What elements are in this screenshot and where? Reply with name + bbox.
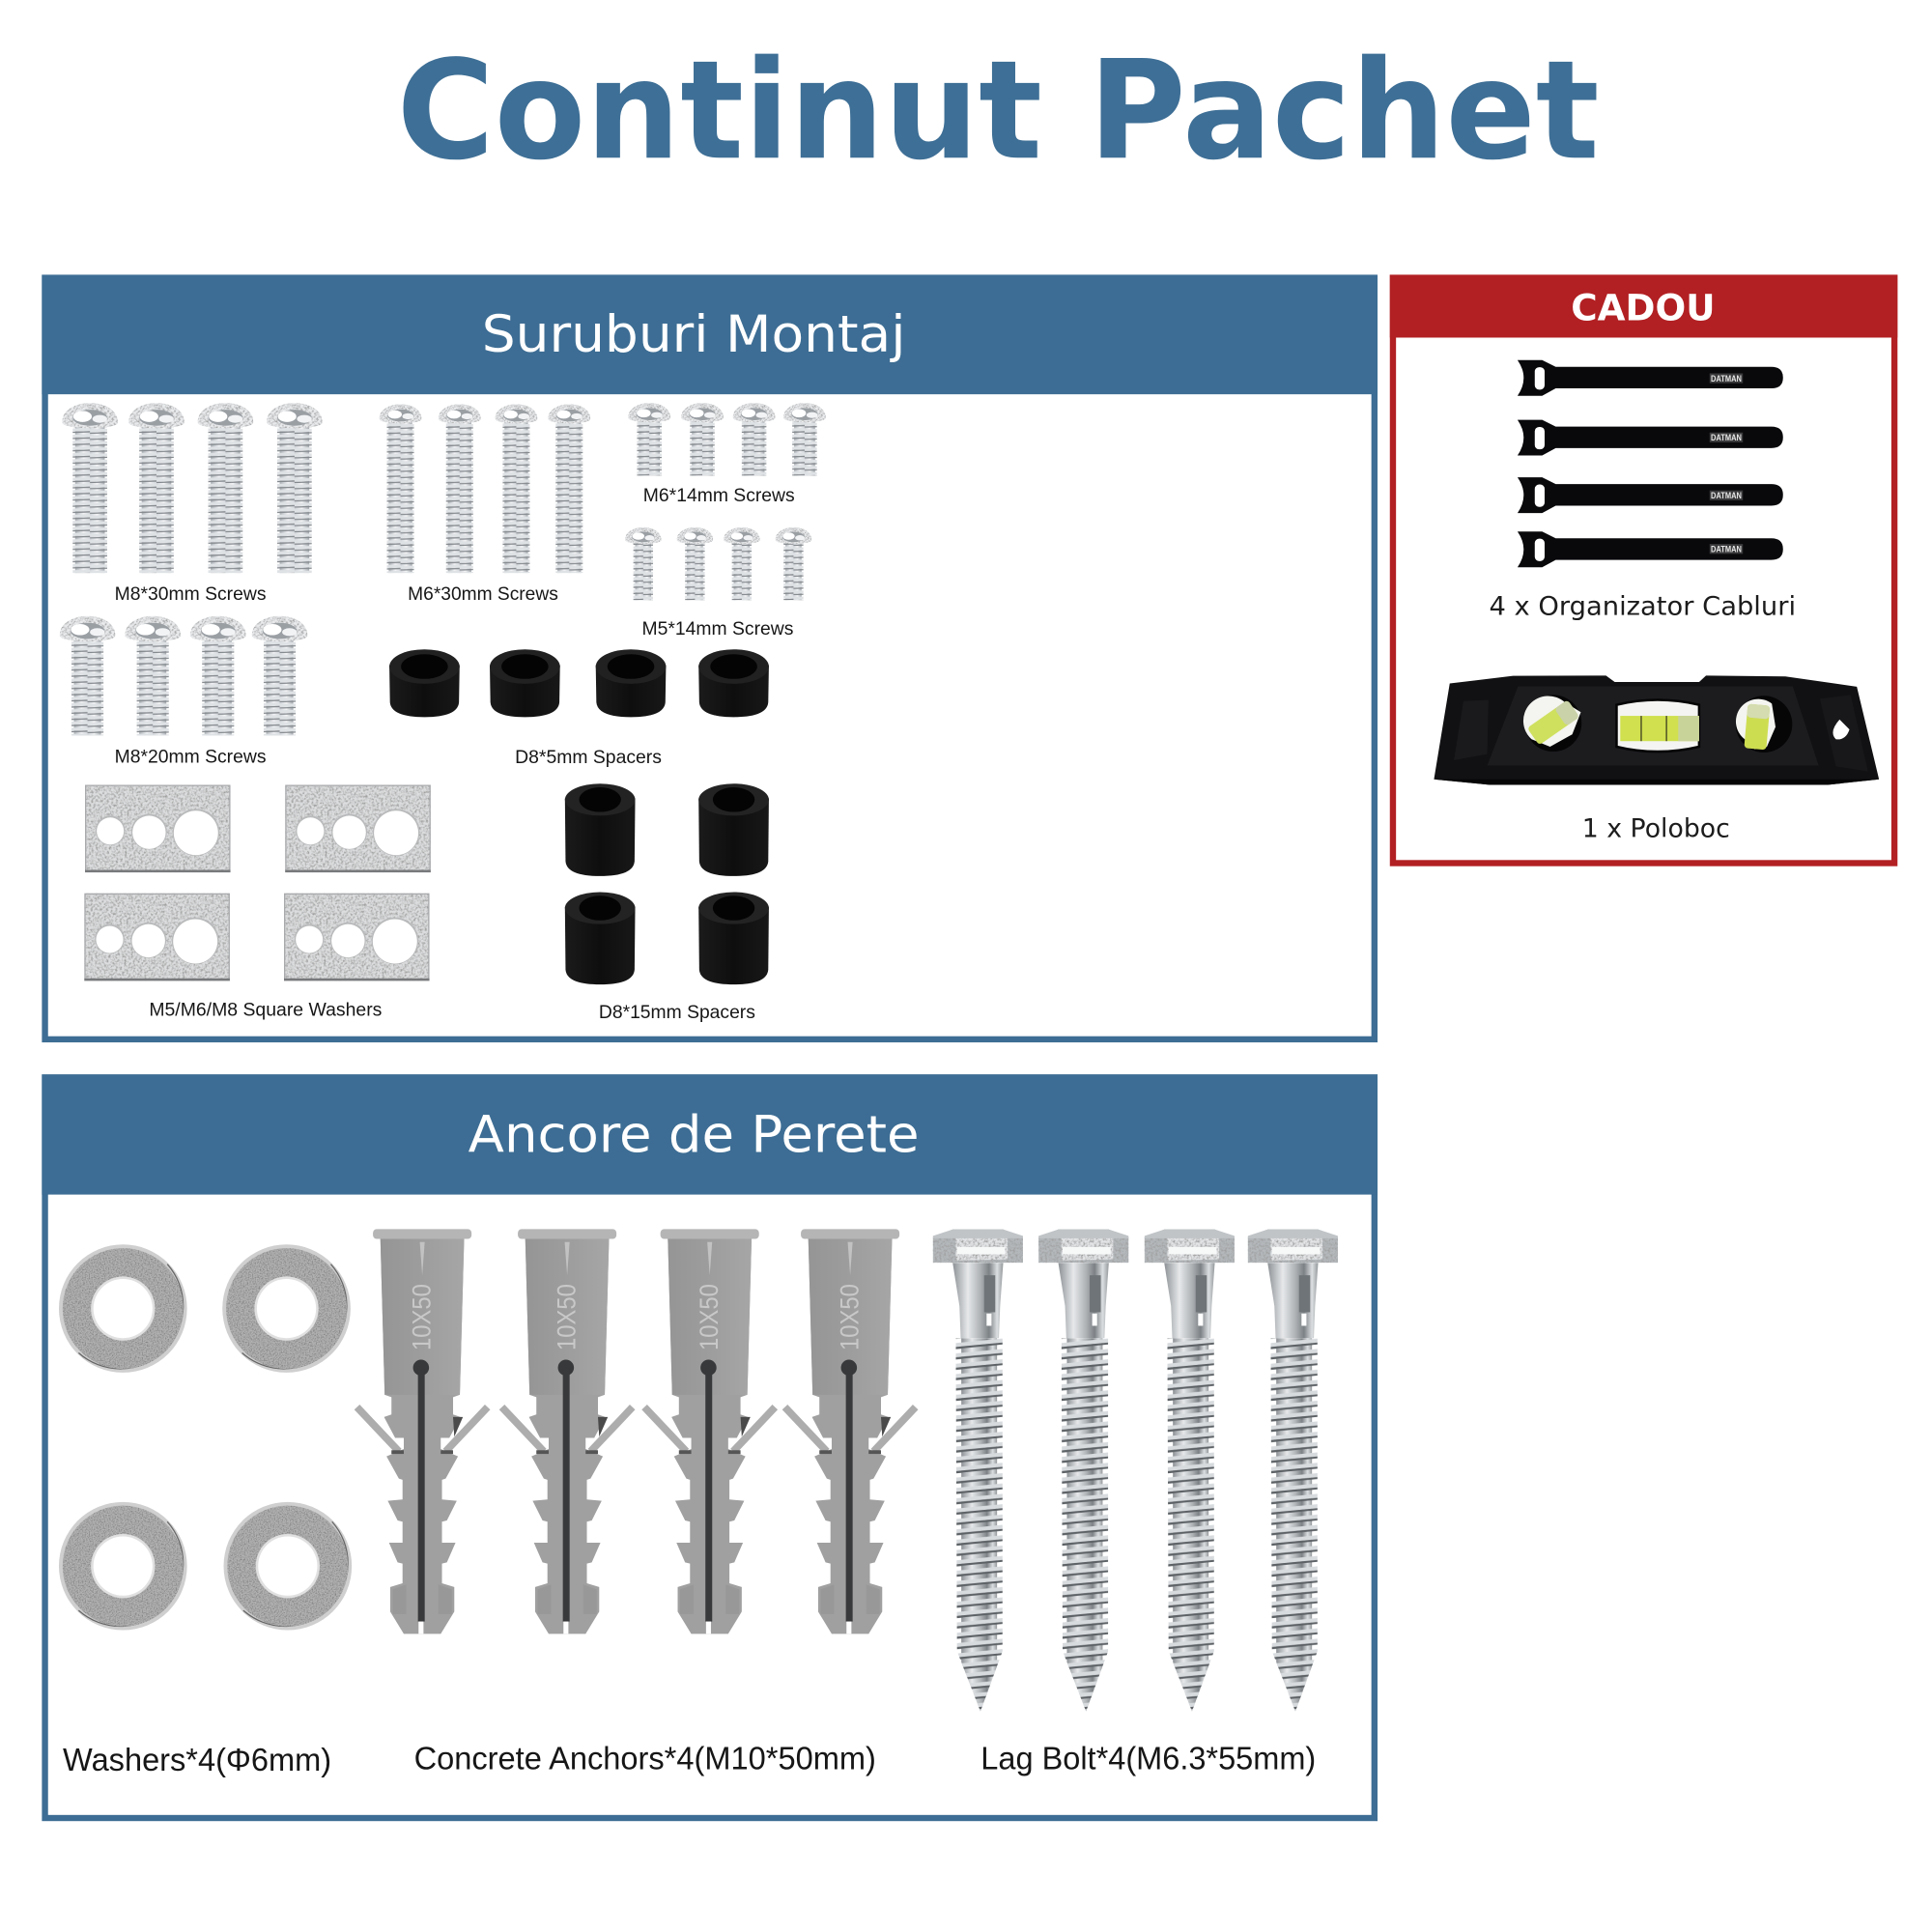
M8*30mm screws — [62, 403, 323, 573]
level label: 1 x Poloboc — [1582, 814, 1730, 844]
concrete anchor 4 — [784, 1229, 916, 1634]
concrete anchor 2 — [502, 1229, 633, 1634]
panel header — [1390, 274, 1897, 337]
heading: Suruburi Montaj — [482, 305, 906, 364]
strap 2 — [1518, 420, 1783, 456]
strap 3 — [1518, 477, 1783, 513]
label: D8*15mm Spacers — [599, 1003, 755, 1023]
title: Continut Pachet — [397, 32, 1600, 190]
M6*30mm screws — [380, 404, 590, 573]
label: Lag Bolt*4(M6.3*55mm) — [980, 1742, 1316, 1777]
label: M6*30mm Screws — [408, 584, 558, 605]
label: Concrete Anchors*4(M10*50mm) — [414, 1742, 876, 1777]
label: M8*20mm Screws — [115, 748, 267, 768]
cable straps — [1518, 360, 1783, 567]
panel: Ancore de Perete — [42, 1074, 1378, 1818]
label: M8*30mm Screws — [115, 584, 267, 605]
label: Washers*4(Φ6mm) — [63, 1743, 331, 1778]
concrete anchor 2: 10X50 — [552, 1284, 581, 1350]
panel header — [42, 274, 1378, 394]
label: M6*14mm Screws — [643, 486, 795, 506]
lag bolts — [933, 1229, 1338, 1712]
label: M5/M6/M8 Square Washers — [149, 1001, 382, 1021]
strap 2: DATMAN — [1711, 433, 1742, 442]
heading: Ancore de Perete — [469, 1106, 920, 1165]
M5*14mm screws — [625, 527, 811, 600]
panel: Suruburi Montaj — [42, 274, 1378, 1039]
strap 4 — [1518, 531, 1783, 567]
spirit level — [1434, 675, 1879, 784]
strap 3: DATMAN — [1711, 491, 1742, 500]
strap 1 — [1518, 360, 1783, 396]
label: D8*5mm Spacers — [515, 748, 662, 768]
M8*20mm screws — [60, 616, 307, 735]
panel header — [42, 1074, 1378, 1195]
strap label: 4 x Organizator Cabluri — [1489, 591, 1796, 621]
square washers — [84, 784, 431, 980]
concrete anchor 4: 10X50 — [835, 1284, 864, 1350]
D8*5mm spacers — [389, 649, 769, 717]
concrete anchor 3 — [644, 1229, 775, 1634]
round washers — [59, 1244, 352, 1631]
concrete anchor 1: 10X50 — [407, 1284, 436, 1350]
D8*15mm spacers — [565, 783, 769, 984]
strap 4: DATMAN — [1711, 545, 1742, 554]
strap 1: DATMAN — [1711, 374, 1742, 384]
M6*14mm screws — [628, 403, 826, 475]
heading: CADOU — [1571, 288, 1716, 329]
concrete anchor 3: 10X50 — [695, 1284, 724, 1350]
panel: CADOU — [1390, 274, 1897, 863]
label: M5*14mm Screws — [642, 619, 793, 639]
concrete anchor 1 — [357, 1229, 488, 1634]
